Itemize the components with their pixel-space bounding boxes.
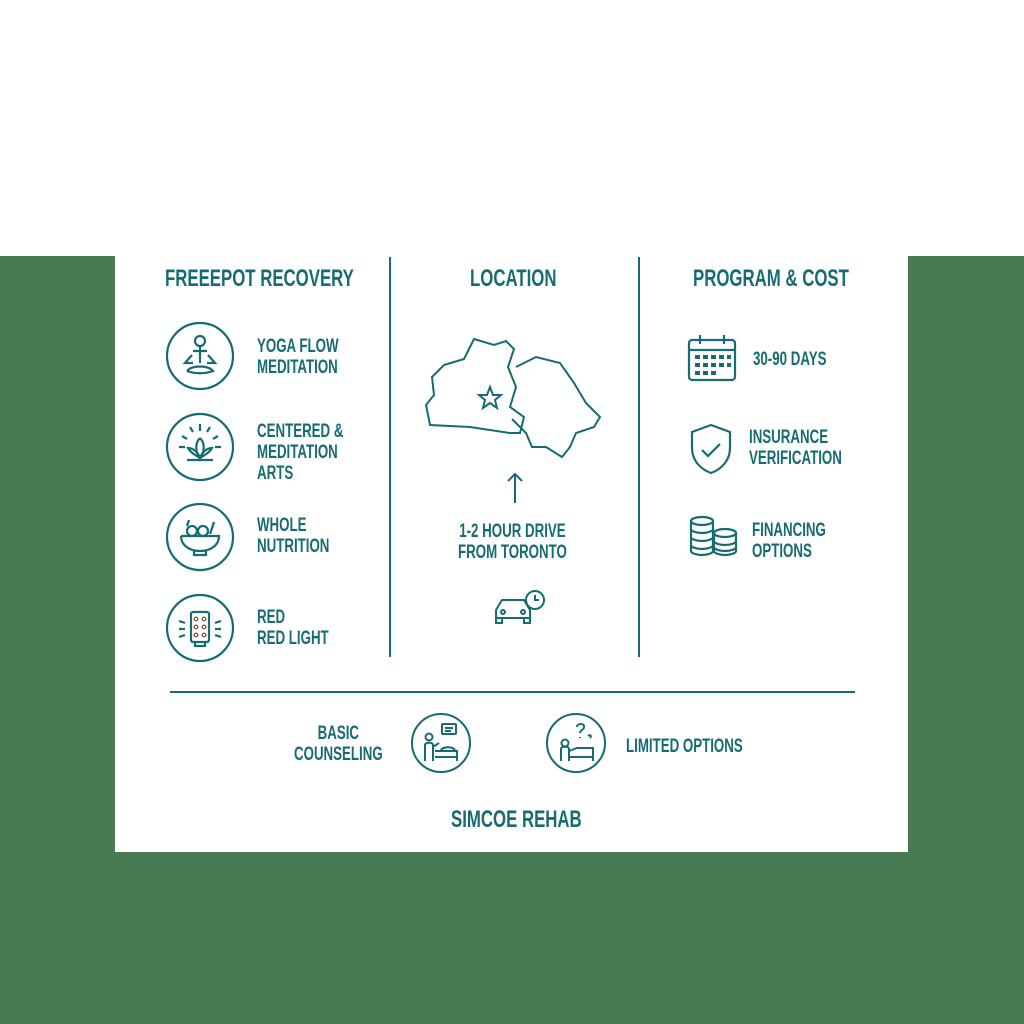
divider lines [389, 257, 391, 657]
map [424, 338, 602, 458]
heading: Freepot Recovery: FREEEPOT RECOVERY [165, 265, 354, 292]
text: red light [257, 607, 329, 649]
text: insurance [749, 427, 842, 469]
text: red light: RED [257, 607, 285, 628]
icon: car clock [495, 590, 545, 624]
text: drive: FROM TORONTO [458, 542, 567, 563]
panel: Freepot Recovery [165, 265, 354, 662]
heading: Location: LOCATION [470, 265, 556, 292]
text: basic counseling [294, 723, 383, 765]
text: centered: MEDITATION [257, 442, 338, 463]
panel: Location [424, 265, 602, 624]
top white band [0, 0, 1024, 256]
icon: counseling [411, 713, 471, 773]
text: financing [752, 520, 826, 562]
text: nutrition [257, 515, 329, 557]
text: financing: OPTIONS [752, 541, 812, 562]
icon: coins [690, 516, 738, 556]
text: financing: FINANCING [752, 520, 826, 541]
text: insurance: INSURANCE [749, 427, 828, 448]
text: centered [257, 421, 344, 484]
text: nutrition: NUTRITION [257, 536, 329, 557]
heading: Simcoe Rehab: SIMCOE REHAB [451, 806, 582, 833]
text: basic counseling: COUNSELING [294, 744, 383, 765]
text: centered: CENTERED & [257, 421, 343, 442]
white card [115, 0, 908, 852]
arrow [507, 472, 523, 503]
text: red light: RED LIGHT [257, 628, 329, 649]
panel: Simcoe Rehab [294, 713, 743, 833]
text: nutrition: WHOLE [257, 515, 307, 536]
text: drive [458, 521, 567, 563]
icon: calendar [688, 335, 736, 382]
text: yoga: MEDITATION [257, 357, 338, 378]
icon: lotus [166, 412, 234, 482]
panel: Program & Cost [688, 265, 849, 562]
text: insurance: VERIFICATION [749, 448, 842, 469]
text: limited options: LIMITED OPTIONS [626, 736, 743, 757]
horizontal divider [170, 691, 855, 693]
icon: red light panel [166, 594, 234, 662]
text: basic counseling: BASIC [318, 723, 359, 744]
text: centered: ARTS [257, 463, 293, 484]
text: yoga [257, 336, 339, 378]
text: yoga: YOGA FLOW [257, 336, 339, 357]
icon: shield [690, 424, 732, 474]
green background [0, 256, 1024, 1024]
icon: limited options [546, 713, 606, 773]
text: days: 30-90 DAYS [753, 349, 826, 370]
icon: yoga [166, 322, 234, 390]
text: drive: 1-2 HOUR DRIVE [459, 521, 566, 542]
heading: Program & Cost: PROGRAM & COST [693, 265, 849, 292]
icon: bowl [166, 502, 234, 572]
